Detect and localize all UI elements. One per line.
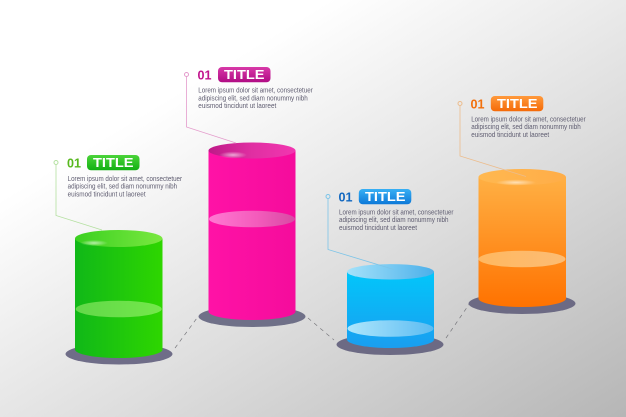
label: green [67,155,140,170]
cylinder level [76,301,162,317]
cylinder body [208,150,296,320]
label: orange: 01 [470,96,484,112]
cylinder body [75,238,162,358]
panel: green cylinder [66,230,172,364]
label: pink [198,67,270,82]
text block: orange: Lorem ipsum dolor sit amet, consectetuer [471,116,586,123]
text block: green: adipiscing elit, sed diam nonummy nibh [68,184,177,191]
label: blue: TITLE [365,190,406,204]
text block: orange: adipiscing elit, sed diam nonummy nibh [471,124,581,131]
connector: green to pink [175,318,197,348]
base shadow [66,344,172,364]
panel: pink cylinder [198,142,306,327]
text block: orange: euismod tincidunt ut laoreet [471,132,549,139]
text block: orange [471,116,586,139]
label: pink: TITLE [224,68,264,82]
text block: pink [198,88,313,110]
cylinder top [75,230,162,247]
text block: blue: Lorem ipsum dolor sit amet, consectetuer [339,209,454,216]
cylinder body [478,177,566,307]
leader: blue [326,194,394,270]
label: green: 01 [67,156,81,170]
panel: blue cylinder [336,264,444,355]
panel: orange cylinder [468,169,576,314]
cylinder top [347,264,434,279]
text block: pink: Lorem ipsum dolor sit amet, consectetuer [198,88,313,95]
text block: blue [339,209,454,232]
cylinder level [209,211,295,227]
text block: pink: euismod tincidunt ut laoreet [198,103,276,110]
connector: pink to blue [308,318,334,340]
base shadow [336,334,444,355]
cylinder level [478,251,566,267]
text block: green: euismod tincidunt ut laoreet [68,191,146,198]
text block: pink: adipiscing elit, sed diam nonummy nibh [198,96,308,102]
text block: green [68,176,183,198]
cylinder top [478,169,566,185]
label: orange [470,96,543,112]
label: blue [338,189,411,204]
text block: green: Lorem ipsum dolor sit amet, consectetuer [68,176,183,183]
base shadow [468,293,576,314]
text block: blue: adipiscing elit, sed diam nonummy nibh [339,217,449,224]
text block: blue: euismod tincidunt ut laoreet [339,225,417,232]
cylinder top [208,142,296,158]
cylinder level [348,320,434,337]
label: orange: TITLE [497,97,538,111]
leader: orange [458,102,526,176]
leader: green [54,160,102,230]
connector: blue to orange [446,303,470,338]
label: blue: 01 [338,190,352,204]
leader: pink [184,72,236,143]
cylinder body [347,272,434,348]
base shadow [198,306,306,327]
label: green: TITLE [93,156,134,170]
label: pink: 01 [198,68,212,82]
